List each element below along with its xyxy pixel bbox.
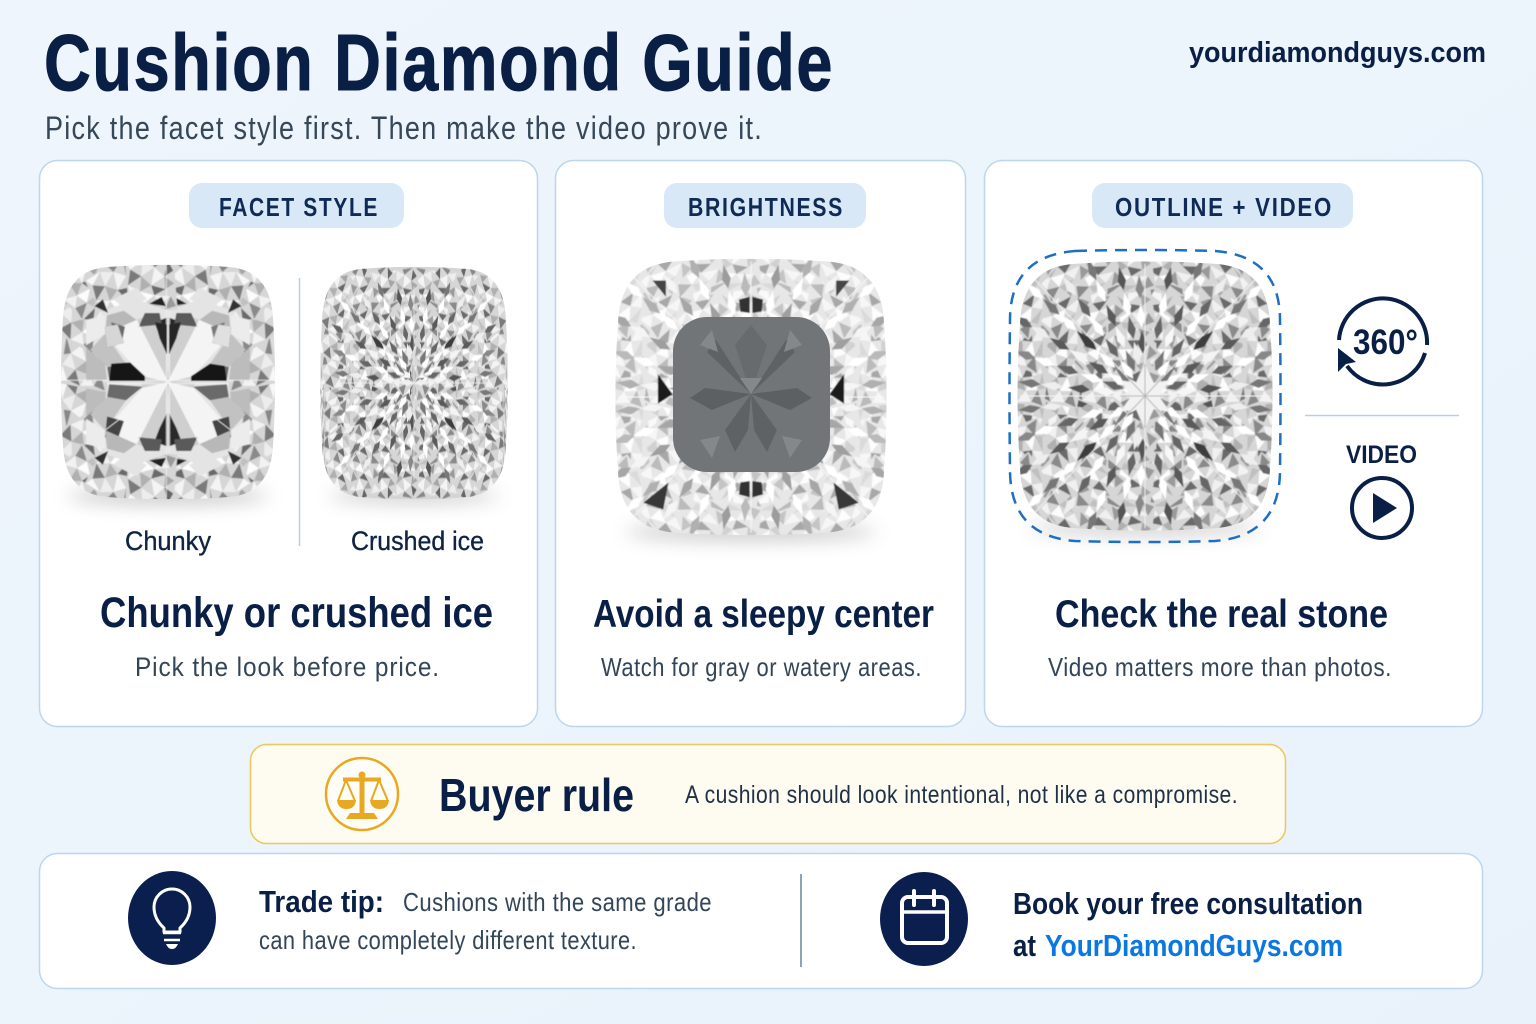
pill: facet style — [189, 183, 404, 228]
diamond: crushed ice — [320, 266, 508, 512]
diamond: chunky — [61, 264, 275, 514]
website: yourdiamondguys.com — [1189, 37, 1486, 69]
pill: brightness: BRIGHTNESS — [688, 192, 844, 222]
body: watch for gray: Watch for gray or watery areas. — [601, 652, 922, 682]
pill: outline + video — [1092, 183, 1353, 228]
diamond: sleepy center — [616, 258, 886, 550]
body: pick the look: Pick the look before price. — [135, 652, 440, 682]
panel: outline + video — [984, 160, 1482, 726]
text: trade tip: can have completely different texture. — [259, 925, 637, 955]
callout: buyer rule — [250, 744, 1286, 844]
divider — [800, 874, 802, 967]
text: trade tip: Cushions with the same grade — [403, 887, 712, 917]
heading: avoid a sleepy center: Avoid a sleepy center — [593, 593, 934, 636]
pill: brightness — [664, 183, 866, 228]
text: trade tip — [259, 884, 712, 955]
heading: check the real stone: Check the real stone — [1055, 593, 1388, 636]
subtitle: Pick the facet style first. Then make the video prove it. — [45, 110, 763, 146]
text: consultation: YourDiamondGuys.com — [1045, 928, 1343, 963]
text: consultation: Book your free consultation — [1013, 886, 1363, 921]
heading: buyer rule: Buyer rule — [439, 769, 634, 821]
body: video matters: Video matters more than photos. — [1048, 652, 1392, 682]
label: chunky: Chunky — [125, 526, 211, 556]
panel: footer — [40, 854, 1482, 988]
text: trade tip: Trade tip: — [259, 884, 384, 919]
diamond: outlined stone — [1008, 248, 1282, 544]
divider — [1305, 414, 1459, 416]
text: consultation — [1013, 886, 1363, 963]
panel: facet style — [40, 160, 538, 726]
heading: chunky or crushed ice: Chunky or crushed ice — [100, 589, 493, 637]
text: rule: A cushion should look intentional, not like a compromise. — [685, 781, 1238, 809]
icon: 360 rotation: 360° — [1353, 323, 1418, 362]
icon: scales — [326, 758, 398, 830]
panel: brightness — [556, 160, 966, 726]
label: crushed ice: Crushed ice — [351, 526, 484, 556]
icon: calendar — [880, 872, 968, 966]
divider — [298, 278, 300, 546]
sleepy gray center — [673, 317, 830, 472]
pill: facet style: FACET STYLE — [219, 192, 379, 222]
icon: light bulb — [128, 871, 216, 965]
icon: 360 rotation — [1338, 298, 1427, 384]
text: consultation: at — [1013, 928, 1036, 963]
title: Cushion Diamond Guide — [44, 18, 834, 107]
label: video: VIDEO — [1346, 441, 1417, 469]
dashed outline — [1010, 250, 1280, 542]
pill: outline + video: OUTLINE + VIDEO — [1115, 192, 1333, 222]
icon: play button — [1352, 478, 1412, 538]
